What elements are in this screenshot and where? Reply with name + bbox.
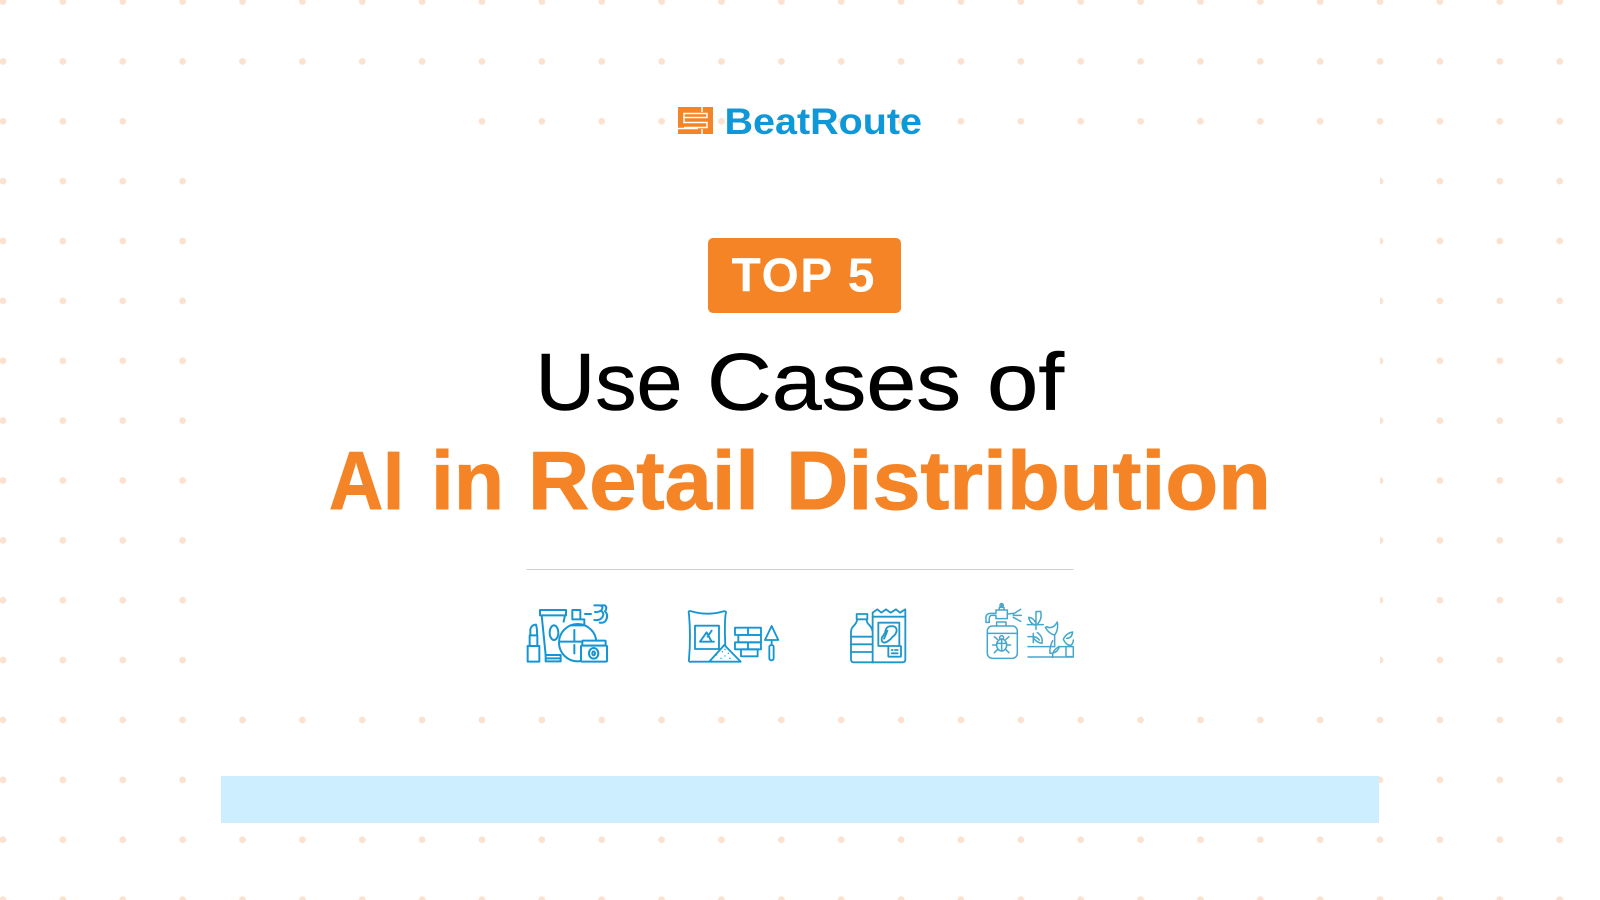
icon: BeatRoute mark xyxy=(678,107,713,134)
badge: TOP 5: TOP 5 xyxy=(732,250,874,302)
icon: cosmetics xyxy=(528,605,607,662)
icon: pesticide sprayer and plants xyxy=(986,604,1073,658)
icon: packaged food and drink xyxy=(851,609,905,662)
title line: AI in Retail Distribution: Retail xyxy=(528,434,759,527)
title line: AI in Retail Distribution: Distribution xyxy=(786,434,1271,527)
logo: BeatRoute xyxy=(678,101,922,142)
wordmark: BeatRoute xyxy=(724,101,922,142)
badge: TOP 5 xyxy=(708,238,901,313)
divider line xyxy=(526,569,1074,570)
title line: Use Cases of: of xyxy=(987,338,1065,428)
title line: Use Cases of: Cases xyxy=(707,338,961,428)
icon: construction materials xyxy=(689,611,778,662)
title line: Use Cases of: Use xyxy=(536,338,682,428)
title line: AI in Retail Distribution: AI xyxy=(329,434,404,527)
light blue footer band xyxy=(221,776,1379,823)
title line: AI in Retail Distribution: in xyxy=(431,434,504,527)
